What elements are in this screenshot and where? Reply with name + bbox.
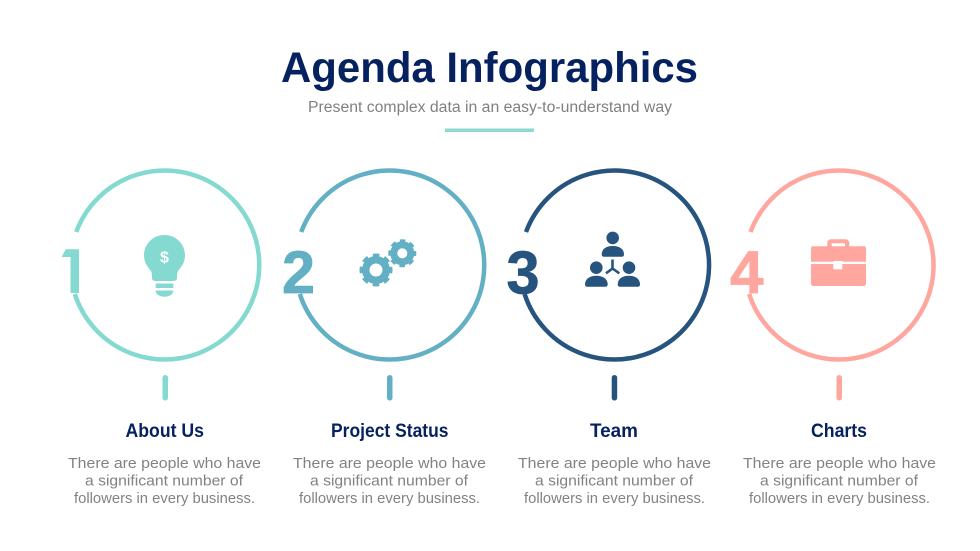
icon: gears — [361, 241, 415, 285]
subtitle: Present complex data in an easy-to-understand way — [308, 99, 672, 116]
heading 3: Team — [590, 421, 638, 442]
body text 3: There are people who have — [518, 455, 711, 472]
body text 2: There are people who have — [293, 455, 486, 472]
body text 2 — [293, 455, 486, 507]
body text 4: followers in every business. — [749, 490, 930, 507]
icon: light bulb with dollar — [144, 235, 185, 297]
body text 2: followers in every business. — [299, 490, 480, 507]
panel: about us — [55, 171, 261, 507]
body text 2: a significant number of — [310, 472, 469, 490]
title underline — [445, 128, 534, 132]
tick 1 — [162, 375, 168, 400]
body text 1 — [68, 455, 261, 507]
heading 2: Project Status — [331, 421, 448, 442]
body text 4: a significant number of — [760, 472, 919, 490]
body text 1: a significant number of — [85, 472, 244, 490]
number 1: 1 — [55, 239, 88, 306]
title: Agenda Infographics — [281, 44, 698, 92]
number 3: 3 — [506, 240, 540, 306]
panel: project status — [282, 171, 486, 507]
body text 3: a significant number of — [535, 472, 694, 490]
tick 2 — [387, 375, 392, 400]
body text 4 — [743, 455, 936, 507]
number 4: 4 — [730, 239, 764, 306]
ring 1 — [75, 171, 259, 360]
ring 2 — [300, 171, 484, 360]
body text 3: followers in every business. — [524, 490, 705, 507]
tick 3 — [612, 375, 617, 400]
number 2: 2 — [282, 239, 315, 306]
icon: light bulb with dollar: $ — [160, 250, 169, 266]
panel: team — [506, 171, 711, 507]
icon: briefcase — [811, 239, 866, 286]
tick 4 — [836, 375, 842, 400]
heading 4: Charts — [811, 421, 867, 442]
icon: team — [585, 232, 640, 287]
body text 3 — [518, 455, 711, 507]
panel: charts — [730, 171, 936, 507]
ring 3 — [525, 171, 709, 360]
body text 4: There are people who have — [743, 455, 936, 472]
number 1 — [62, 249, 79, 293]
body text 1: followers in every business. — [74, 490, 255, 507]
body text 1: There are people who have — [68, 455, 261, 472]
ring 4 — [749, 171, 934, 360]
heading 1: About Us — [126, 421, 204, 442]
